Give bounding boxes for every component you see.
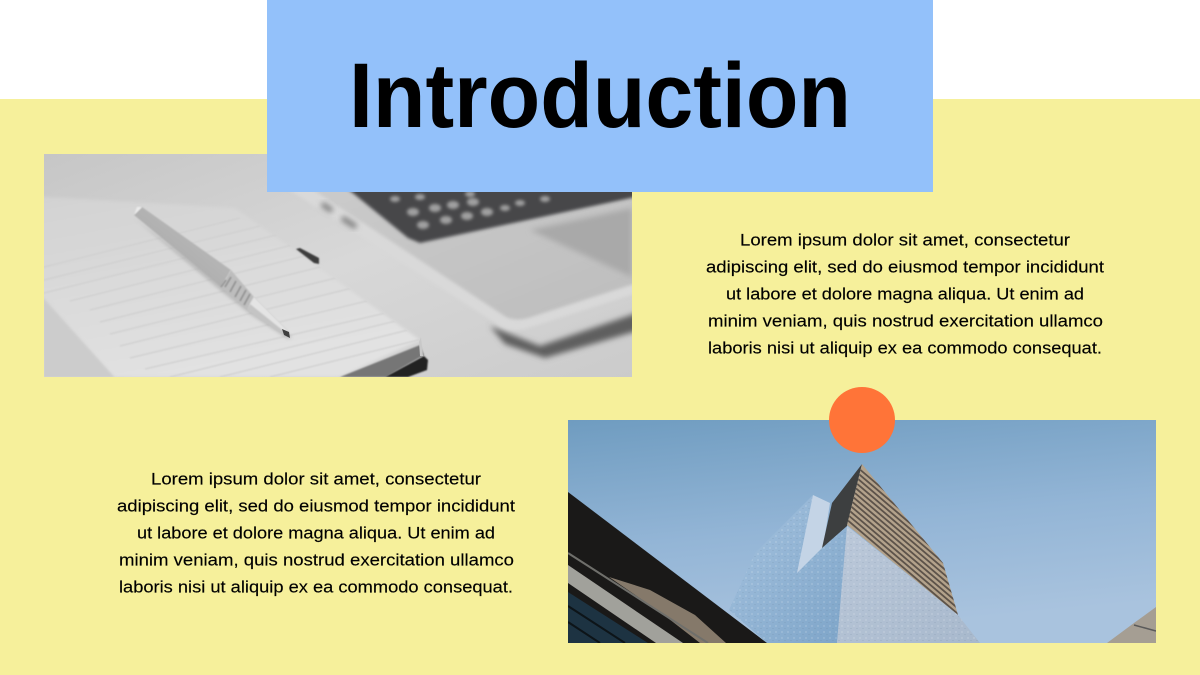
notebook binding (340, 345, 424, 377)
tower silver face (837, 526, 980, 643)
text block: lower left: laboris nisi ut aliquip ex ea commodo consequat. (119, 578, 513, 596)
orange circle (829, 387, 895, 453)
text block: upper right: laboris nisi ut aliquip ex ea commodo consequat. (708, 338, 1102, 358)
foreground dark glass (568, 592, 648, 643)
text block: upper right: Lorem ipsum dolor sit amet, consectetur (740, 230, 1070, 250)
foreground dark building (568, 492, 767, 643)
laptop notch shadow on notebook (296, 248, 319, 264)
text block: lower left: ut labore et dolore magna aliqua. Ut enim ad (137, 524, 495, 542)
photo: notebook, pen and laptop (30, 154, 640, 377)
text block: upper right: ut labore et dolore magna aliqua. Ut enim ad (726, 284, 1084, 304)
text block: lower left: minim veniam, quis nostrud exercitation ullamco (119, 550, 514, 570)
text block: lower left: adipiscing elit, sed do eiusmod tempor incididunt (117, 496, 515, 516)
foreground tan dome (609, 577, 726, 643)
laptop (282, 185, 640, 358)
title: Introduction (349, 45, 851, 147)
pen (134, 207, 292, 339)
text block: upper right: minim veniam, quis nostrud exercitation ullamco (708, 312, 1103, 330)
tower dark shadow face (822, 464, 862, 548)
title panel (267, 0, 933, 192)
ruled lines (111, 288, 416, 376)
text block: lower left (117, 470, 515, 596)
text block: lower left: Lorem ipsum dolor sit amet, consectetur (151, 470, 481, 488)
tower light strip (797, 495, 830, 573)
right corner building (1107, 607, 1156, 643)
photo: glass skyscraper against blue sky (568, 420, 1156, 643)
text block: upper right: adipiscing elit, sed do eiusmod tempor incididunt (706, 258, 1104, 276)
notebook (30, 196, 440, 377)
foreground roof band (568, 553, 708, 643)
tower left glass face (729, 495, 847, 643)
text block: upper right (706, 230, 1104, 358)
tower brown slatted face (847, 464, 958, 615)
